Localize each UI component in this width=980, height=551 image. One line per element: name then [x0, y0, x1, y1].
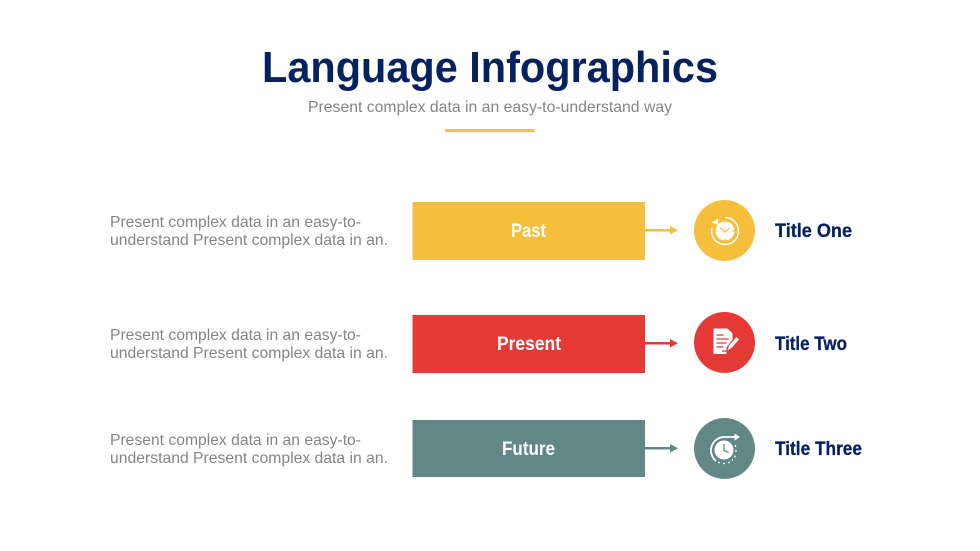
description: future: understand Present complex data in an. [110, 450, 388, 467]
bar: past: Past [511, 221, 547, 242]
icon: document with pen [694, 312, 755, 373]
description: past [110, 214, 388, 249]
row: present [110, 312, 847, 373]
title underline [445, 129, 534, 132]
row: future [110, 418, 862, 479]
description: past: understand Present complex data in an. [110, 232, 388, 249]
icon: clock with circular arrow [694, 200, 755, 261]
bar: past [412, 202, 645, 260]
description: present [110, 327, 388, 362]
description: future [110, 432, 388, 467]
bar: future [412, 420, 645, 477]
arrow: future [645, 444, 678, 452]
label: title three: Title Three [775, 439, 862, 460]
description: present: understand Present complex data in an. [110, 345, 388, 362]
description: present: Present complex data in an easy-to- [110, 327, 361, 344]
arrow: present [645, 339, 678, 348]
subtitle: Present complex data in an easy-to-understand way [308, 99, 672, 116]
arrow: past [645, 226, 678, 234]
bar: present: Present [497, 334, 562, 355]
label: title two: Title Two [775, 334, 847, 355]
description: future: Present complex data in an easy-to- [110, 432, 361, 449]
description: past: Present complex data in an easy-to- [110, 214, 361, 231]
bar: present [412, 315, 645, 373]
title: Language Infographics [262, 43, 718, 92]
label: title one: Title One [775, 221, 852, 242]
icon: clock with forward arrow [694, 418, 755, 479]
bar: future: Future [502, 439, 555, 460]
row: past [110, 200, 852, 261]
